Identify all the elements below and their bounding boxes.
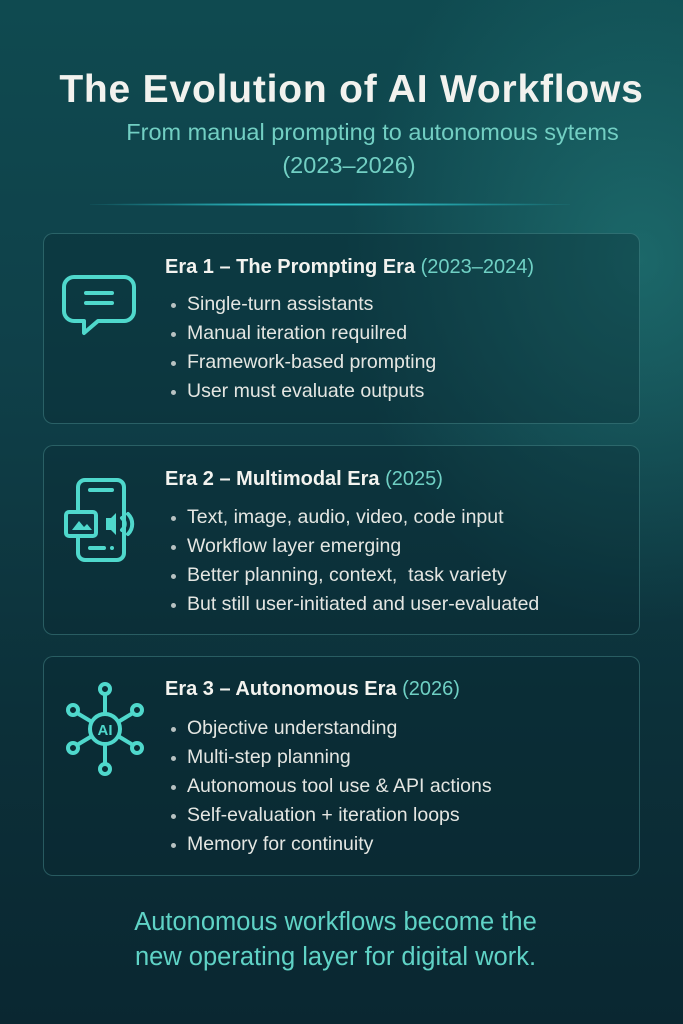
footer statement [134, 908, 537, 971]
bullets era 3: Self-evaluation + iteration loops [187, 804, 460, 826]
heading era 3: Era 3 – Autonomous Era (2026) [165, 678, 460, 700]
title: The Evolution of AI Workflows [59, 68, 644, 111]
bullets era 1: Single-turn assistants [187, 293, 373, 315]
bullets era 2 [171, 506, 539, 615]
icon: chat bubble [62, 275, 136, 336]
heading era 2: Era 2 – Multimodal Era (2025) [165, 468, 443, 490]
bullets era 2: Better planning, context, task variety [187, 564, 507, 586]
bullets era 3: Autonomous tool use & API actions [187, 775, 492, 797]
bullets era 1: Manual iteration requilred [187, 322, 407, 344]
subtitle years: (2023–2026) [282, 152, 416, 178]
panel: era 3 [43, 656, 640, 876]
bullets era 3: Multi-step planning [187, 746, 351, 768]
bullets era 2: But still user-initiated and user-evaluated [187, 593, 539, 615]
icon: multimodal phone [64, 478, 134, 562]
heading era 1: Era 1 – The Prompting Era (2023–2024) [165, 256, 534, 278]
footer statement: new operating layer for digital work. [135, 943, 536, 971]
panel: era 2 [43, 445, 640, 635]
subtitle: From manual prompting to autonomous sytems [126, 119, 619, 145]
bullets era 3: Memory for continuity [187, 833, 373, 855]
bullets era 2: Workflow layer emerging [187, 535, 401, 557]
glow divider [90, 203, 570, 206]
bullets era 2: Text, image, audio, video, code input [187, 506, 504, 528]
panel: era 1 [43, 233, 640, 424]
bullets era 3 [171, 717, 492, 855]
icon: AI network [66, 682, 144, 776]
icon: AI network: AI [98, 722, 112, 739]
bullets era 1: Framework-based prompting [187, 351, 436, 373]
footer statement: Autonomous workflows become the [134, 908, 537, 936]
bullets era 1: User must evaluate outputs [187, 380, 424, 402]
bullets era 1 [171, 293, 436, 402]
bullets era 3: Objective understanding [187, 717, 397, 739]
